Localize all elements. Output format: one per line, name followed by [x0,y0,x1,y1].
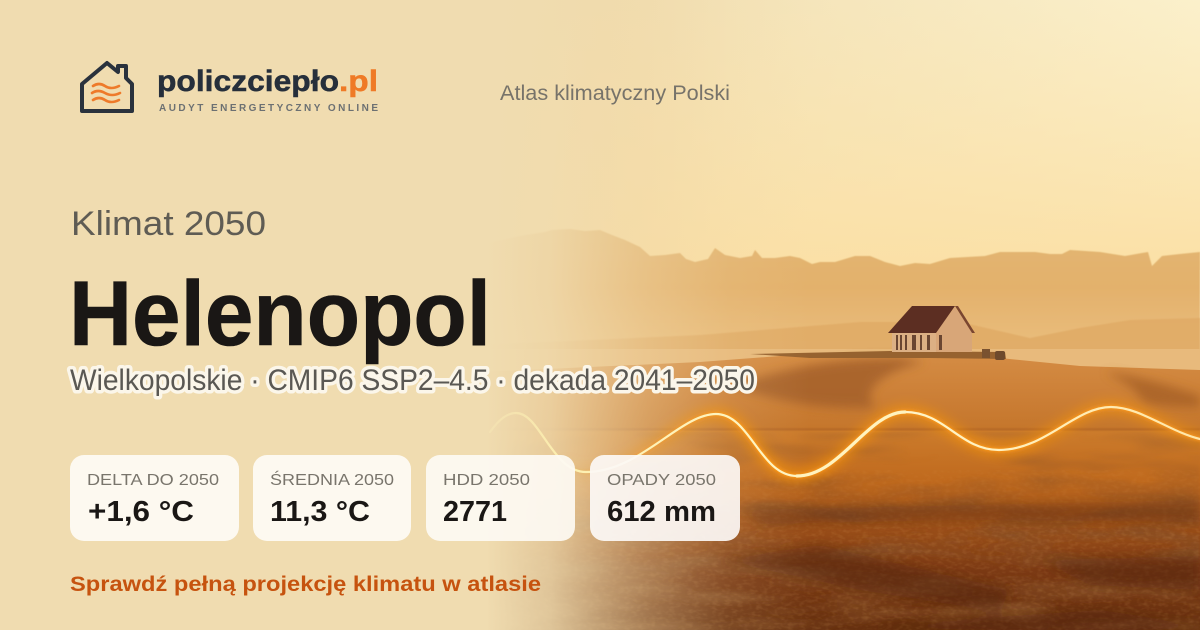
logo domain: .pl [339,65,378,98]
glowing temperature wave [490,407,1200,476]
icon: house on the hill [888,306,1005,360]
value: 11,3 °C [270,496,370,528]
call to action: Sprawdź pełną projekcję klimatu w atlasie [70,573,541,596]
landscape scene [480,229,1200,630]
stat card: delta [70,455,239,541]
dune shadows [730,358,925,408]
eyebrow heading: Klimat 2050 [71,205,266,243]
label: HDD 2050 [443,472,530,489]
stat card: mean [253,455,411,541]
wheat field [480,430,1200,630]
ridge under the house [750,351,1006,359]
atlas label: Atlas klimatyczny Polski [500,82,730,105]
label: DELTA DO 2050 [87,472,219,489]
icon: house with heat waves [82,63,132,111]
logo tagline: AUDYT ENERGETYCZNY ONLINE [159,103,378,114]
subtitle with halo: Wielkopolskie · CMIP6 SSP2–4.5 · dekada 2041–2050 [70,364,755,397]
logo wordmark: policzciepło [157,65,339,98]
rolling dunes [480,352,1200,440]
title: Helenopol [69,263,491,365]
distant tree line [480,229,1200,360]
haze band [480,349,1200,373]
value: 2771 [443,496,507,528]
stat card: HDD [426,455,575,541]
left fade overlay [0,0,810,630]
logo [82,63,378,114]
field texture [588,432,1200,630]
far hills [480,318,1200,365]
value: +1,6 °C [88,496,194,528]
field horizon line [480,428,1200,431]
label: OPADY 2050 [607,472,716,489]
stat card: precipitation [590,455,740,541]
value: 612 mm [607,496,716,528]
label: ŚREDNIA 2050 [270,470,394,489]
